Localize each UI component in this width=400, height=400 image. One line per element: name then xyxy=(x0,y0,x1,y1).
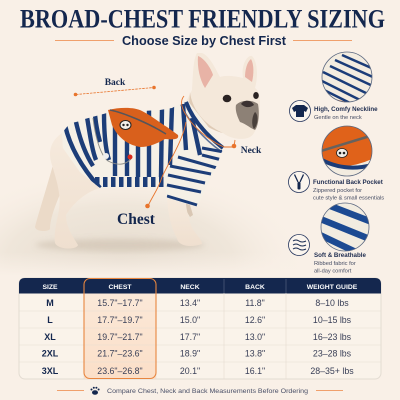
table header: SIZE xyxy=(42,284,58,291)
row 3XL: 3XL xyxy=(42,366,59,376)
chest column outline xyxy=(84,278,156,378)
feature: neckline text xyxy=(314,106,378,121)
row 3XL: 28–35+ lbs xyxy=(310,366,354,376)
row 2XL: 23–28 lbs xyxy=(313,348,352,358)
feature: pocket text: Functional Back Pocket xyxy=(313,179,383,186)
orange pocket xyxy=(108,108,178,147)
neck measurement callout xyxy=(182,96,262,156)
table header: WEIGHT GUIDE xyxy=(307,284,358,291)
feature: neckline text: High, Comfy Neckline xyxy=(314,106,378,113)
row XL: 16–23 lbs xyxy=(313,332,352,342)
row 3XL: 23.6"–26.8" xyxy=(97,366,143,376)
back measurement callout: Back xyxy=(105,78,126,88)
far rear and front legs xyxy=(35,165,66,231)
icon: t-shirt xyxy=(290,100,310,122)
row 3XL: 20.1" xyxy=(180,366,200,376)
chest measurement callout xyxy=(117,122,186,228)
row M: 15.7"–17.7" xyxy=(97,298,143,308)
row 2XL: 13.8" xyxy=(245,348,265,358)
shirt stripes xyxy=(65,104,224,205)
icon: air waves xyxy=(288,234,310,256)
row 2XL: 21.7"–23.6" xyxy=(97,348,143,358)
row 2XL xyxy=(42,348,352,358)
feature: pocket text: cute style & small essentials xyxy=(313,196,384,202)
row L: 10–15 lbs xyxy=(313,315,352,325)
row L xyxy=(47,315,352,325)
detail photo: neckline xyxy=(322,52,372,102)
feature: fabric text xyxy=(314,252,366,274)
collar xyxy=(186,102,223,148)
dog in striped shirt xyxy=(35,53,260,251)
neck measurement callout: Neck xyxy=(241,146,262,156)
floor shadow xyxy=(35,239,205,251)
subtitle with side rules: Choose Size by Chest First xyxy=(122,33,287,48)
near rear leg and hindquarters xyxy=(50,133,100,249)
size table xyxy=(19,278,381,379)
table header: CHEST xyxy=(108,284,132,291)
table header: NECK xyxy=(180,284,200,291)
back measurement callout xyxy=(74,78,156,96)
row XL: 13.0" xyxy=(245,332,265,342)
row M: 13.4" xyxy=(180,298,200,308)
near front leg xyxy=(167,198,202,246)
feature: pocket text xyxy=(313,179,384,202)
row XL: 17.7" xyxy=(180,332,200,342)
chest measurement callout: Chest xyxy=(117,211,156,228)
feature: fabric text: Ribbed fabric for xyxy=(314,261,356,267)
detail photo: ribbed fabric xyxy=(320,202,370,252)
row M xyxy=(46,298,349,308)
row XL xyxy=(44,332,352,342)
icon: paw xyxy=(90,387,100,395)
chain and charm xyxy=(93,118,135,164)
feature: fabric text: Soft & Breathable xyxy=(314,252,366,259)
icon: zipper xyxy=(288,172,310,192)
shirt xyxy=(62,100,223,207)
feature: pocket text: Zippered pocket for xyxy=(313,188,362,194)
neck shading xyxy=(189,92,223,133)
hem ribbing xyxy=(95,177,165,187)
row 2XL: 2XL xyxy=(42,348,59,358)
table header xyxy=(19,278,381,294)
row XL: 19.7"–21.7" xyxy=(97,332,143,342)
row 3XL: 16.1" xyxy=(245,366,265,376)
head and ears xyxy=(187,53,260,139)
row L: 12.6" xyxy=(245,315,265,325)
footer note: Compare Chest, Neck and Back Measurements Before Ordering xyxy=(107,388,309,395)
chest column highlight xyxy=(84,294,156,379)
row M: 8–10 lbs xyxy=(315,298,349,308)
eyes and muzzle xyxy=(223,95,231,102)
row M: M xyxy=(46,298,54,308)
inner ears xyxy=(198,56,213,88)
row 2XL: 18.9" xyxy=(180,348,200,358)
row L: 17.7"–19.7" xyxy=(97,315,143,325)
footer note xyxy=(57,387,343,395)
row L: L xyxy=(47,315,53,325)
row 3XL xyxy=(42,366,354,376)
feature: fabric text: all-day comfort xyxy=(314,268,352,274)
row M: 11.8" xyxy=(245,298,265,308)
table header: BACK xyxy=(245,284,265,291)
row L: 15.0" xyxy=(180,315,200,325)
floor shading xyxy=(0,150,400,276)
row XL: XL xyxy=(44,332,56,342)
detail photo: pocket xyxy=(322,126,372,176)
feature: neckline text: Gentle on the neck xyxy=(314,115,362,121)
